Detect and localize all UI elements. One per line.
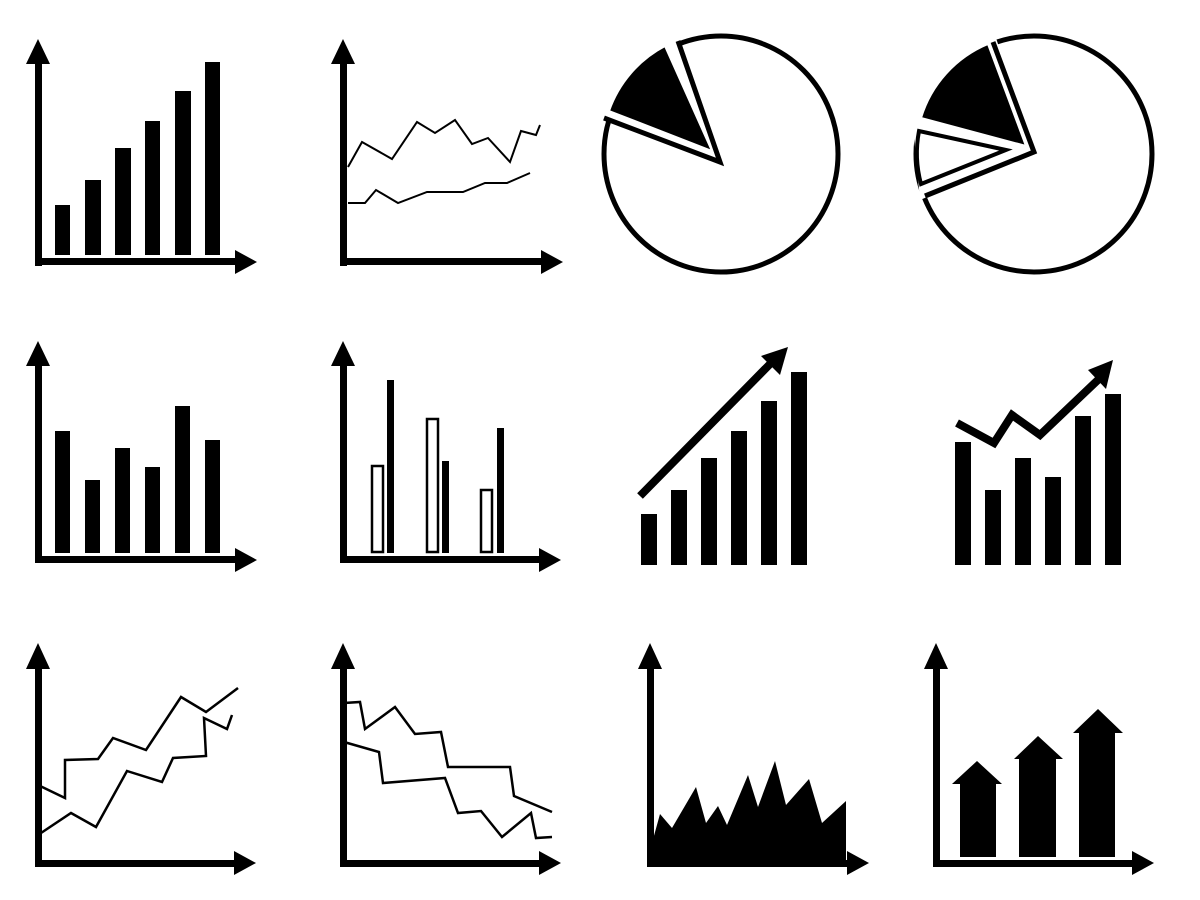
icon: rising bar chart with axes	[26, 39, 257, 274]
icon: pie chart with two slices	[905, 32, 1152, 272]
icon: area chart	[638, 643, 869, 875]
icon: bars with zigzag arrow	[955, 360, 1121, 565]
icon: falling zigzag line chart	[331, 643, 561, 875]
icon: varied bar chart with axes	[26, 341, 257, 572]
icon: growth bars with rising arrow	[640, 347, 807, 565]
icon: rising zigzag line chart	[26, 643, 256, 875]
icon: grouped bar chart with outlined bars	[331, 341, 561, 572]
icon: pie chart with exploded slice	[602, 36, 838, 272]
icon: arrow bar chart	[924, 643, 1154, 875]
icon: two line chart with axes	[331, 39, 563, 274]
